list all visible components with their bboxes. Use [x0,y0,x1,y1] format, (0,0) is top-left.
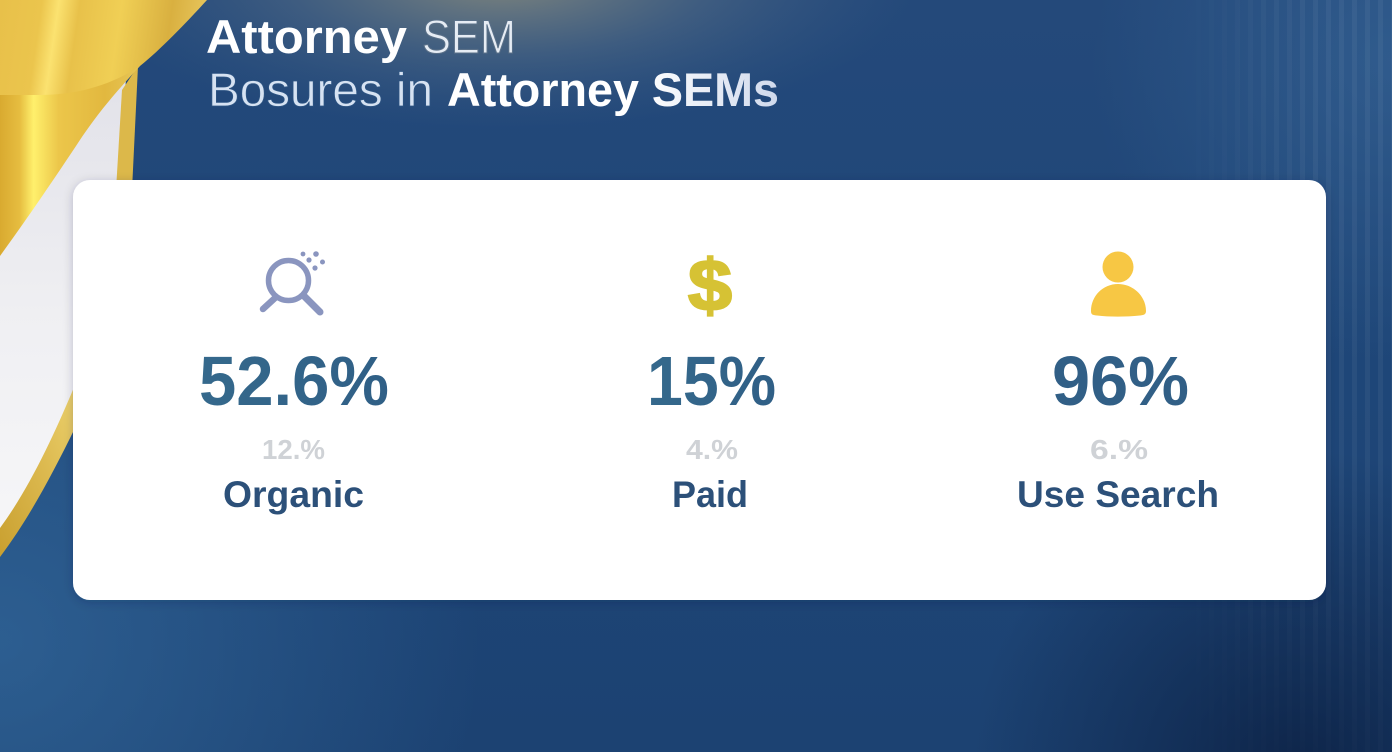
title line 2: Attorney SEMs [447,63,779,116]
icon: dollar sign: $ [688,246,732,326]
title line 1: Attorney [206,10,407,63]
stat: organic [199,251,389,515]
icon: person [1091,252,1146,317]
sub value: 4.%: 4.% [686,434,738,465]
gold vertical strip [116,66,138,190]
title [206,10,779,116]
gold ribbon corner decoration [0,0,207,557]
white paper behind curl [0,78,126,540]
value: 96%: 96% [1052,342,1189,420]
label: Paid: Paid [672,474,748,515]
icon: magnifying glass [263,251,325,312]
value: 15%: 15% [647,342,776,420]
sub value: 6.%: 6.% [1090,434,1148,465]
title line 2: Bosures in [208,63,433,116]
gold lower ribbon [0,385,75,557]
gold curl fold [0,66,140,256]
gold curl top [0,0,207,95]
title line 2 [208,63,779,116]
panel: stats card [73,180,1326,600]
title line 1: SEM [422,10,516,63]
label: Use Search: Use Search [1017,474,1219,515]
stat: use search [1017,252,1219,515]
sub value: 12.%: 12.% [262,434,325,465]
title line 1 [206,10,516,63]
value: 52.6%: 52.6% [199,342,389,420]
stat: paid [647,246,776,515]
label: Organic: Organic [223,474,364,515]
